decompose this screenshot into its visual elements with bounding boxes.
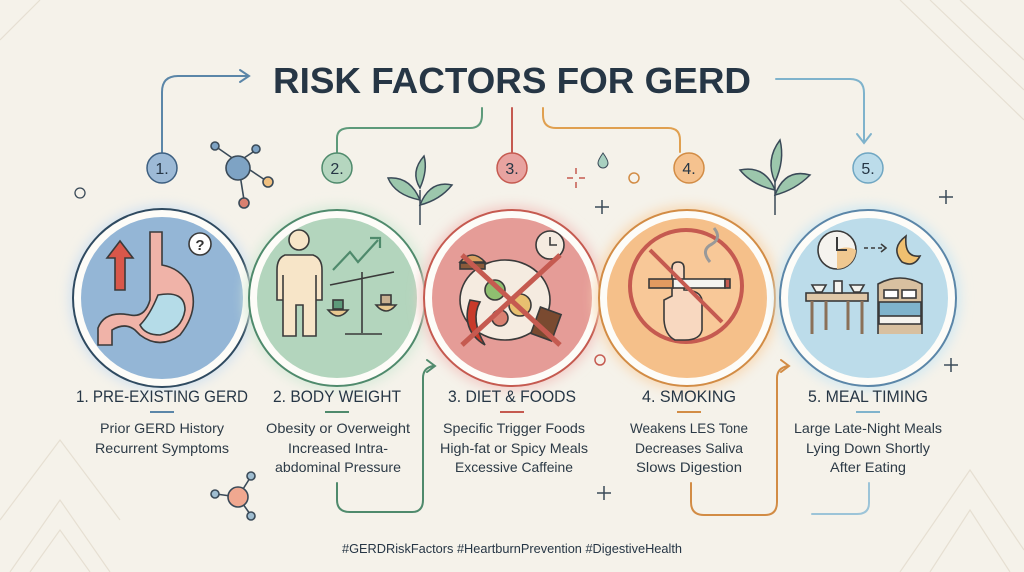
text: desc 1 [95, 420, 229, 456]
icon: person and scale [277, 230, 396, 336]
text: desc 3 [440, 420, 588, 475]
panel: 1 pre-existing GERD [70, 153, 254, 456]
badge 4 [674, 153, 704, 183]
icon: no smoking [630, 228, 742, 342]
decorations [75, 140, 958, 520]
icon: food plate crossed [460, 231, 564, 345]
text: desc 2: Obesity or Overweight [266, 420, 410, 436]
text: desc 5: Lying Down Shortly [806, 440, 930, 456]
badge 4: 4. [682, 161, 696, 178]
icon: stomach: ? [195, 237, 205, 254]
text: desc 4: Weakens LES Tone [630, 420, 748, 436]
panel: 4 smoking [595, 153, 779, 475]
badge 2 [322, 153, 352, 183]
text: desc 4 [630, 420, 748, 475]
badge 3 [497, 153, 527, 183]
text: title 1: 1. PRE-EXISTING GERD [76, 387, 248, 406]
badge 5: 5. [861, 161, 875, 178]
icon: stomach [98, 232, 211, 345]
text: title 2: 2. BODY WEIGHT [273, 387, 401, 406]
badge 2: 2. [330, 161, 344, 178]
text: desc 5: Large Late-Night Meals [794, 420, 942, 436]
hashtags footer: #GERDRiskFactors #HeartburnPrevention #DigestiveHealth [342, 541, 682, 556]
text: desc 5: After Eating [830, 459, 906, 475]
text: desc 2 [266, 420, 410, 475]
text: desc 5 [794, 420, 942, 475]
text: desc 2: Increased Intra- [288, 440, 388, 456]
text: desc 4: Slows Digestion [636, 459, 742, 475]
text: desc 3: Excessive Caffeine [455, 459, 573, 475]
text: desc 3: High-fat or Spicy Meals [440, 440, 588, 456]
badge 1 [147, 153, 177, 183]
title: RISK FACTORS FOR GERD [273, 60, 751, 101]
text: desc 4: Decreases Saliva [635, 440, 743, 456]
text: desc 2: abdominal Pressure [275, 459, 401, 475]
arrow: bottom connectors [337, 360, 869, 515]
text: title 5: 5. MEAL TIMING [808, 387, 928, 406]
text: desc 1: Recurrent Symptoms [95, 440, 229, 456]
text: desc 3: Specific Trigger Foods [443, 420, 585, 436]
text: desc 1: Prior GERD History [100, 420, 224, 436]
panel: 5 meal timing [776, 153, 960, 475]
badge 5 [853, 153, 883, 183]
text: title 4: 4. SMOKING [642, 387, 736, 406]
text: title 3: 3. DIET & FOODS [448, 387, 576, 406]
badge 3: 3. [505, 161, 519, 178]
arrow: top connectors [162, 70, 871, 152]
panel: 2 body weight [245, 153, 429, 475]
panel: 3 diet & foods [420, 153, 604, 475]
icon: clock, moon, table and bed [806, 231, 922, 334]
badge 1: 1. [155, 161, 169, 178]
